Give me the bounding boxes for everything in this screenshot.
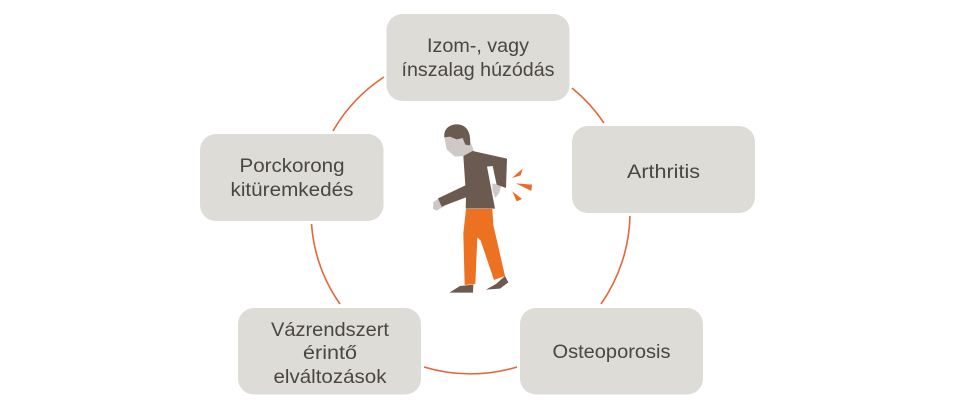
panel: osteoporosis: Osteoporosis	[552, 341, 671, 363]
panel: herniated disc: Porckorong	[240, 155, 344, 177]
pain marks	[512, 169, 532, 201]
panel: skeletal changes: elváltozások	[274, 366, 387, 388]
cycle ring arcs	[312, 77, 630, 374]
panel: osteoporosis	[520, 308, 703, 394]
skin: head and neck	[444, 133, 474, 157]
torso and arms	[438, 151, 507, 209]
shoes	[449, 276, 508, 293]
icon: man holding aching back	[433, 124, 532, 293]
panel: arthritis	[572, 126, 755, 213]
panel: skeletal changes: érintő	[303, 342, 357, 364]
panel: herniated disc: kitüremkedés	[230, 179, 354, 201]
skin: hands	[433, 183, 501, 211]
trousers	[463, 209, 505, 285]
panel: muscle or ligament strain: ínszalag húzódás	[402, 59, 555, 81]
panel: muscle or ligament strain	[386, 14, 570, 101]
panel: herniated disc	[200, 134, 384, 221]
panel: skeletal changes	[238, 308, 421, 394]
panel: muscle or ligament strain: Izom-, vagy	[427, 35, 529, 57]
hair	[444, 124, 470, 145]
panel: skeletal changes: Vázrendszert	[271, 319, 390, 341]
panel: arthritis: Arthritis	[627, 161, 700, 183]
